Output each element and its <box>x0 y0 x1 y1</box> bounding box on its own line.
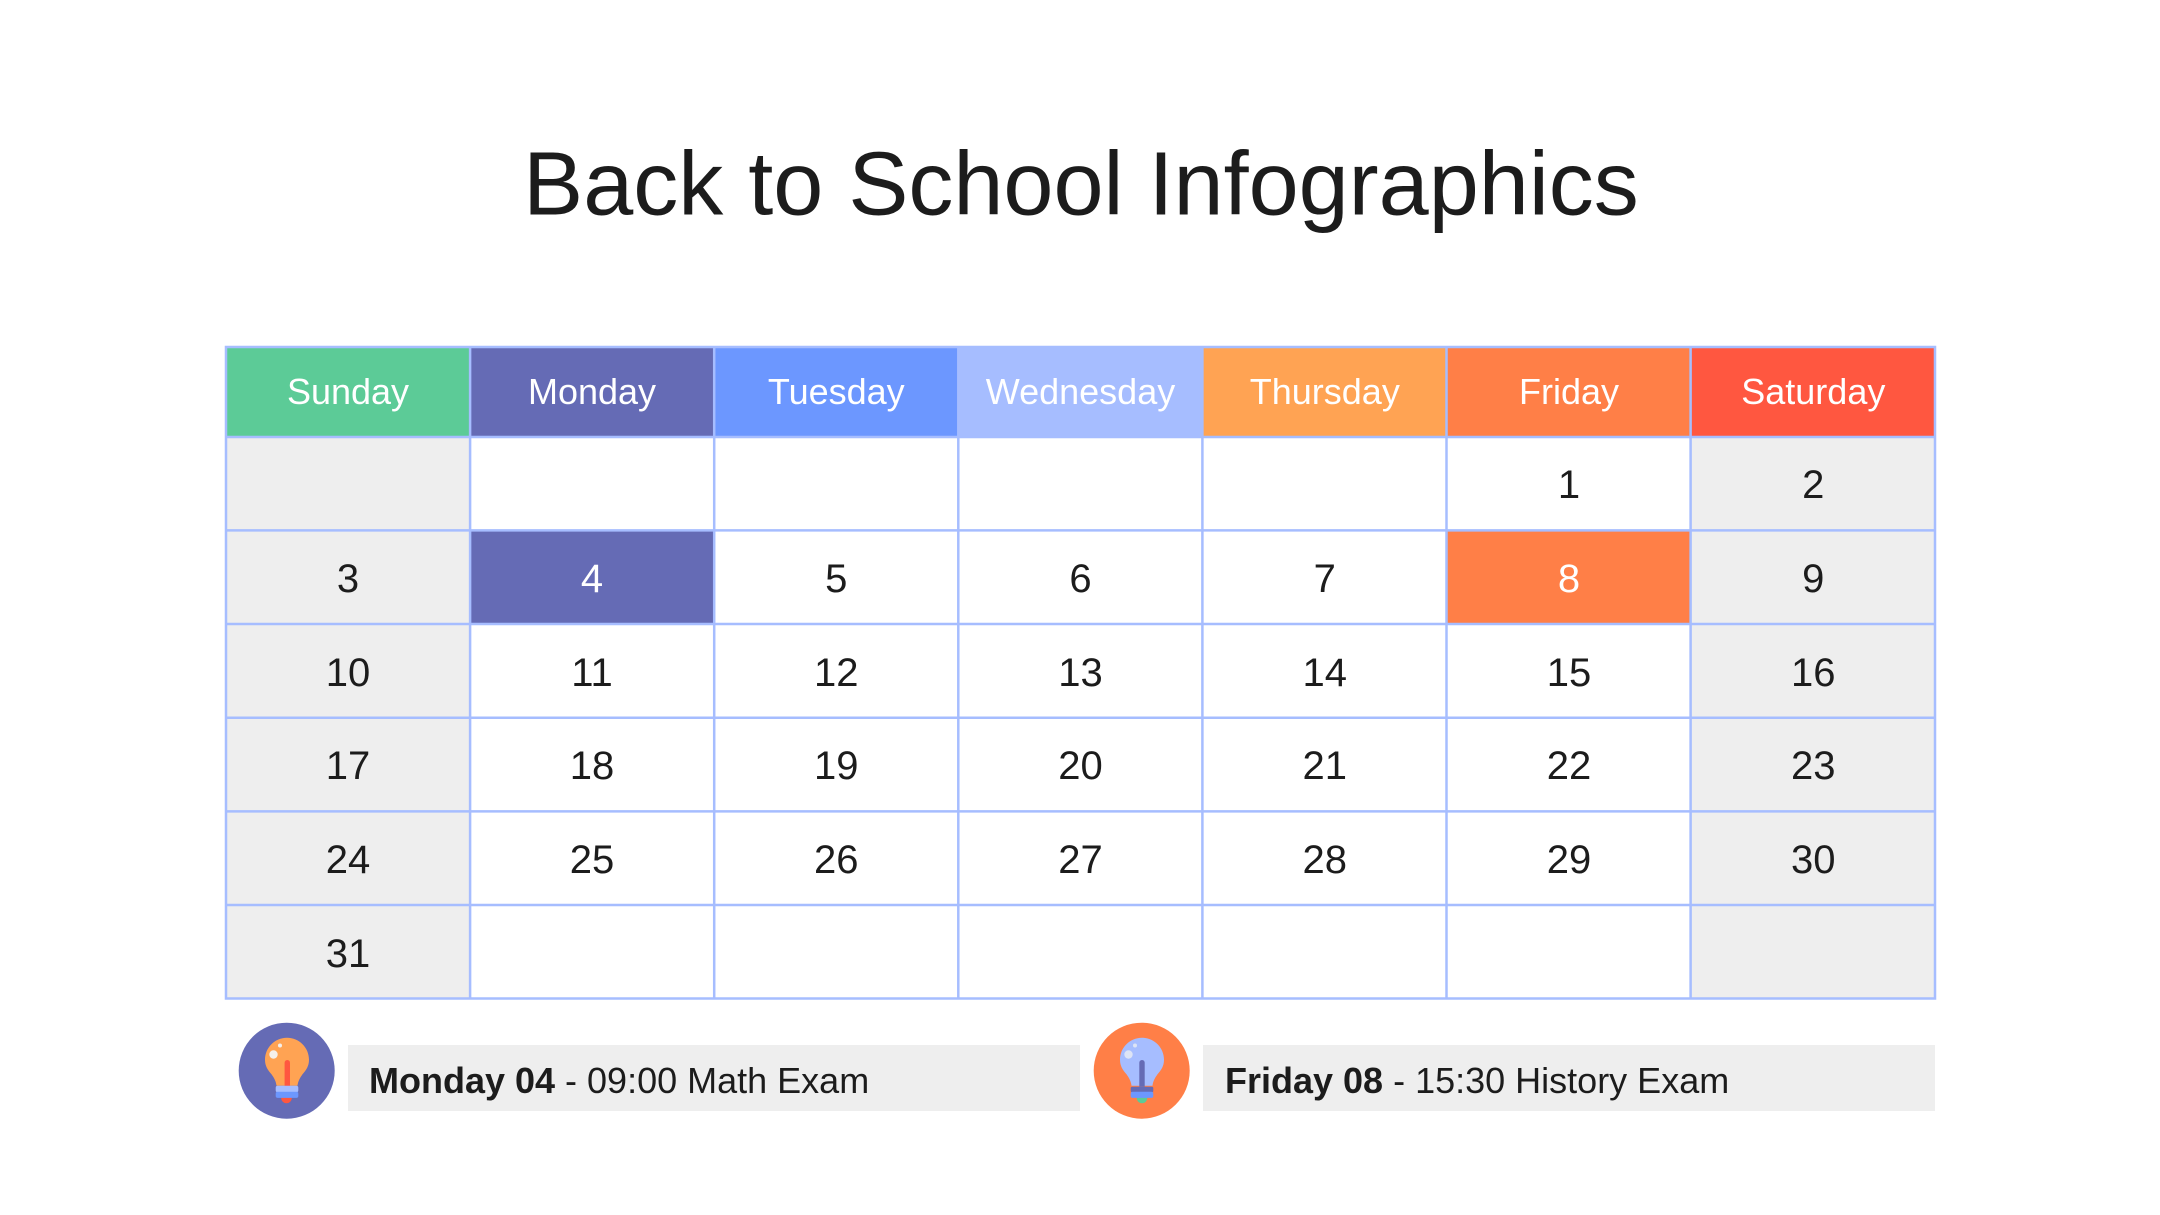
weekday header row: Friday <box>1519 371 1619 412</box>
day numbers: 27 <box>1058 838 1103 882</box>
day numbers: 26 <box>814 838 859 882</box>
weekend column shading <box>226 437 1935 998</box>
day numbers: 5 <box>825 557 847 601</box>
day numbers: 28 <box>1303 838 1347 882</box>
day numbers: 30 <box>1791 838 1836 882</box>
day numbers: 20 <box>1058 744 1103 788</box>
weekday header row: Thursday <box>1250 371 1400 412</box>
weekday header row: Saturday <box>1741 371 1885 412</box>
weekday header row: Sunday <box>287 371 409 412</box>
day numbers: 12 <box>814 651 859 695</box>
day numbers: 31 <box>326 932 370 976</box>
day numbers: 9 <box>1802 557 1824 601</box>
weekday header row: Tuesday <box>768 371 905 412</box>
highlighted day: Friday 8 <box>1446 530 1691 624</box>
day numbers: 15 <box>1547 651 1591 695</box>
day numbers: 1 <box>1558 463 1580 507</box>
callout: Friday exam <box>1203 1045 1935 1111</box>
day numbers: 21 <box>1303 744 1347 788</box>
day numbers: 29 <box>1547 838 1591 882</box>
day numbers: 11 <box>571 651 613 695</box>
day numbers: 2 <box>1802 463 1824 507</box>
icon: lightbulb, Friday <box>1094 1023 1190 1119</box>
day numbers: 24 <box>326 838 370 882</box>
day numbers: 22 <box>1547 744 1591 788</box>
day numbers: 3 <box>337 557 359 601</box>
day numbers: 13 <box>1058 651 1103 695</box>
day numbers: 7 <box>1314 557 1336 601</box>
day numbers: 6 <box>1069 557 1092 601</box>
calendar table <box>226 347 1935 998</box>
title: Back to School Infographics <box>523 134 1639 234</box>
weekday header row: Wednesday <box>986 371 1175 412</box>
day numbers: 17 <box>326 744 370 788</box>
highlighted day: Monday 4 <box>470 530 714 624</box>
day numbers: 23 <box>1791 744 1836 788</box>
day numbers: 10 <box>326 651 370 695</box>
weekday header row <box>226 347 1935 437</box>
day numbers <box>326 463 1836 976</box>
day numbers: 8 <box>1558 557 1580 601</box>
icon: lightbulb, Monday <box>239 1023 335 1119</box>
day numbers: 4 <box>581 557 603 601</box>
callout: Friday exam: Friday 08 - 15:30 History Exam <box>1225 1060 1729 1101</box>
day numbers: 25 <box>570 838 614 882</box>
day numbers: 16 <box>1791 651 1836 695</box>
weekday header row: Monday <box>528 371 656 412</box>
day numbers: 14 <box>1303 651 1347 695</box>
callout: Monday exam <box>348 1045 1080 1111</box>
day numbers: 19 <box>814 744 859 788</box>
callout: Monday exam: Monday 04 - 09:00 Math Exam <box>369 1060 869 1101</box>
day numbers: 18 <box>570 744 614 788</box>
